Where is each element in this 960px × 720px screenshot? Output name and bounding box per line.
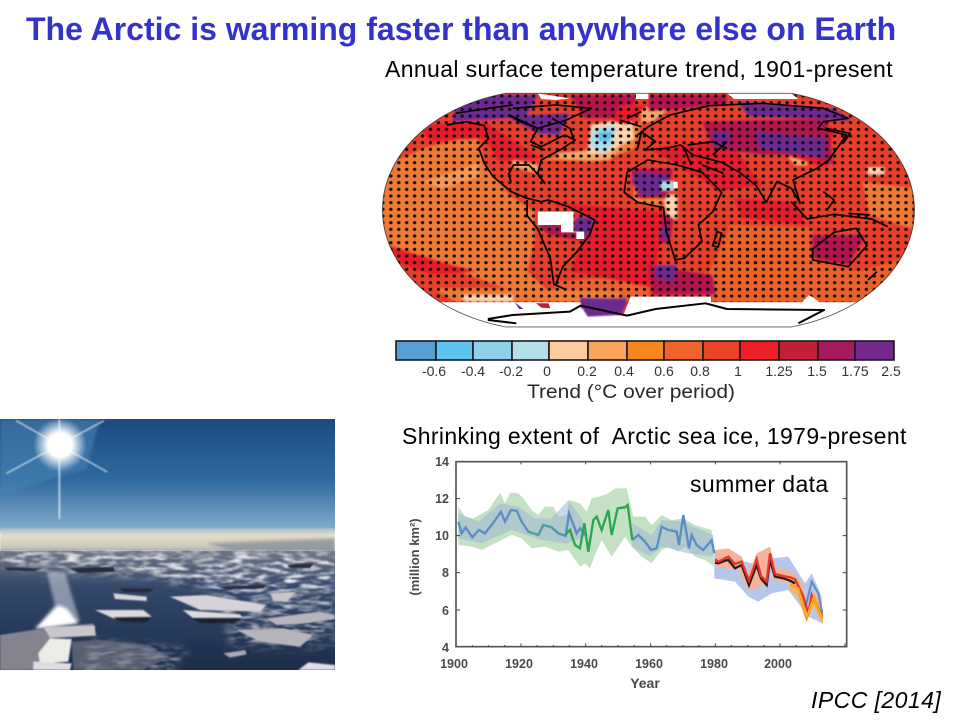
legend tick labels: 2.5: [881, 363, 901, 379]
legend tick labels: 0.2: [577, 363, 597, 379]
x axis title: Year: [630, 675, 660, 691]
axes frame: [456, 462, 847, 647]
legend tick labels: [422, 363, 901, 379]
sun and rays: [7, 418, 107, 518]
red line: [715, 553, 822, 617]
black line: [715, 560, 795, 585]
far ice field: [0, 550, 335, 672]
y axis tick labels: 6: [442, 604, 449, 618]
title: The Arctic is warming faster than anywhere else on Earth: [26, 11, 896, 47]
y axis tick labels: 4: [442, 641, 449, 655]
significance dots: [382, 94, 914, 302]
plot area: [456, 462, 847, 647]
legend axis title: Trend (°C over period): [527, 382, 735, 403]
photo: sun over melting Arctic sea ice: [0, 418, 335, 672]
legend tick labels: 1.75: [841, 363, 869, 379]
ice floes: [0, 592, 335, 670]
legend tick labels: 0.6: [654, 363, 674, 379]
legend tick labels: 1.25: [765, 363, 793, 379]
orange patches: [381, 135, 548, 292]
y axis tick labels: [435, 455, 449, 655]
x axis tick labels: 1980: [700, 657, 728, 671]
x axis tick labels: 1940: [570, 657, 598, 671]
cool patches: [590, 126, 616, 153]
y axis title: (million km²): [407, 518, 422, 596]
legend tick labels: 0.8: [690, 363, 710, 379]
blue line: [458, 510, 585, 537]
x axis tick labels: 2000: [764, 657, 792, 671]
legend tick labels: 0.4: [614, 363, 634, 379]
legend tick labels: 0: [543, 363, 551, 379]
summer data label: summer data: [690, 471, 829, 497]
green uncertainty band: [458, 488, 714, 568]
orange line: [790, 585, 822, 618]
map heading: Annual surface temperature trend, 1901-present: [385, 56, 893, 82]
green line: [565, 505, 632, 552]
legend tick labels: 1: [734, 363, 742, 379]
y axis tick labels: 12: [435, 492, 449, 506]
sea ice extent line chart: [407, 455, 847, 691]
y axis tick labels: 8: [442, 566, 449, 580]
legend tick labels: -0.4: [461, 363, 485, 379]
x axis tick labels: 1920: [505, 657, 533, 671]
legend tick labels: -0.2: [499, 363, 523, 379]
colour legend bar: [396, 341, 901, 403]
red patches: [388, 138, 763, 288]
x axis tick labels: 1900: [440, 657, 468, 671]
y axis tick labels: 14: [435, 455, 449, 469]
blue uncertainty band: [458, 500, 713, 557]
legend tick labels: -0.6: [422, 363, 446, 379]
sea ice heading: Shrinking extent of Arctic sea ice, 1979-present: [402, 423, 907, 449]
world temperature trend map: [382, 92, 915, 328]
sun glitter on water: [37, 572, 80, 628]
source credit: IPCC [2014]: [811, 687, 941, 713]
x axis tick labels: [440, 657, 792, 671]
y axis tick labels: 10: [435, 529, 449, 543]
crimson and purple patches: [538, 95, 866, 295]
x axis tick labels: 1960: [635, 657, 663, 671]
no-data white areas: [538, 182, 678, 239]
legend tick labels: 1.5: [807, 363, 827, 379]
coastlines: [447, 103, 888, 323]
